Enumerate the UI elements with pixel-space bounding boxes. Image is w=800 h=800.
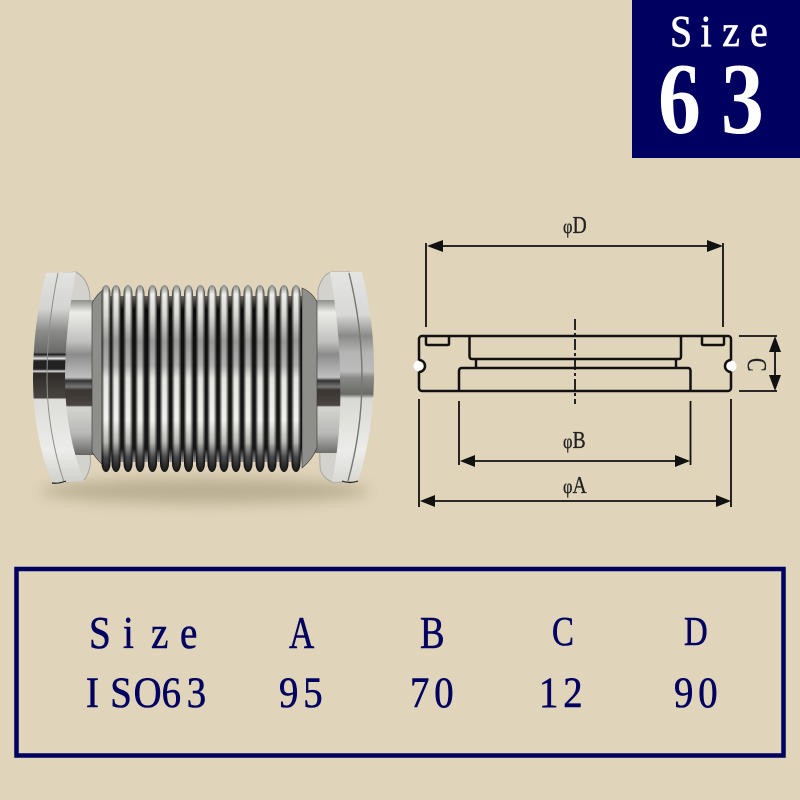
left collar xyxy=(92,289,104,466)
flange outline xyxy=(419,336,731,391)
centre line xyxy=(574,319,576,404)
value row: ISO63 xyxy=(86,669,206,716)
header row: D xyxy=(684,610,708,655)
dimension A xyxy=(419,399,731,507)
dark gaps between ribs xyxy=(102,296,302,462)
value row: 95 xyxy=(279,669,323,716)
product photo: stainless steel bellows xyxy=(33,272,374,504)
label: phi B: φB xyxy=(563,426,586,453)
header row: Size xyxy=(89,608,197,659)
value row: 70 xyxy=(410,669,454,716)
right hub xyxy=(306,300,342,453)
value row: 12 xyxy=(539,669,583,716)
right flange back ring xyxy=(318,272,350,482)
dimension D xyxy=(426,240,723,327)
dimension B xyxy=(459,401,690,467)
header row: A xyxy=(289,607,315,658)
label: phi A: φA xyxy=(563,471,587,498)
label: phi D: φD xyxy=(563,211,587,238)
table frame xyxy=(16,569,784,756)
dimension C xyxy=(739,336,781,391)
value row xyxy=(86,669,718,716)
technical drawing: flange cross-section xyxy=(414,211,781,507)
clamp grooves xyxy=(414,360,736,372)
value row: 90 xyxy=(674,669,718,716)
label: C: C xyxy=(741,358,771,372)
ribs xyxy=(102,285,300,472)
badge number: 63: 63 xyxy=(658,43,764,156)
left flange front band xyxy=(33,272,84,483)
header row: B xyxy=(420,608,445,659)
right slot xyxy=(702,336,724,345)
ground shadow xyxy=(40,478,370,504)
specification table xyxy=(16,569,784,756)
right flange front band xyxy=(330,272,374,482)
header row xyxy=(89,607,708,659)
badge label: Size: Size xyxy=(670,8,768,57)
left hub xyxy=(62,300,96,455)
size badge xyxy=(632,0,800,158)
right collar xyxy=(302,288,317,468)
stepped inner profile xyxy=(459,336,690,391)
header row: C xyxy=(552,610,574,655)
left slot xyxy=(426,336,449,345)
left flange back ring xyxy=(60,272,90,482)
bellows corrugations xyxy=(102,285,302,472)
